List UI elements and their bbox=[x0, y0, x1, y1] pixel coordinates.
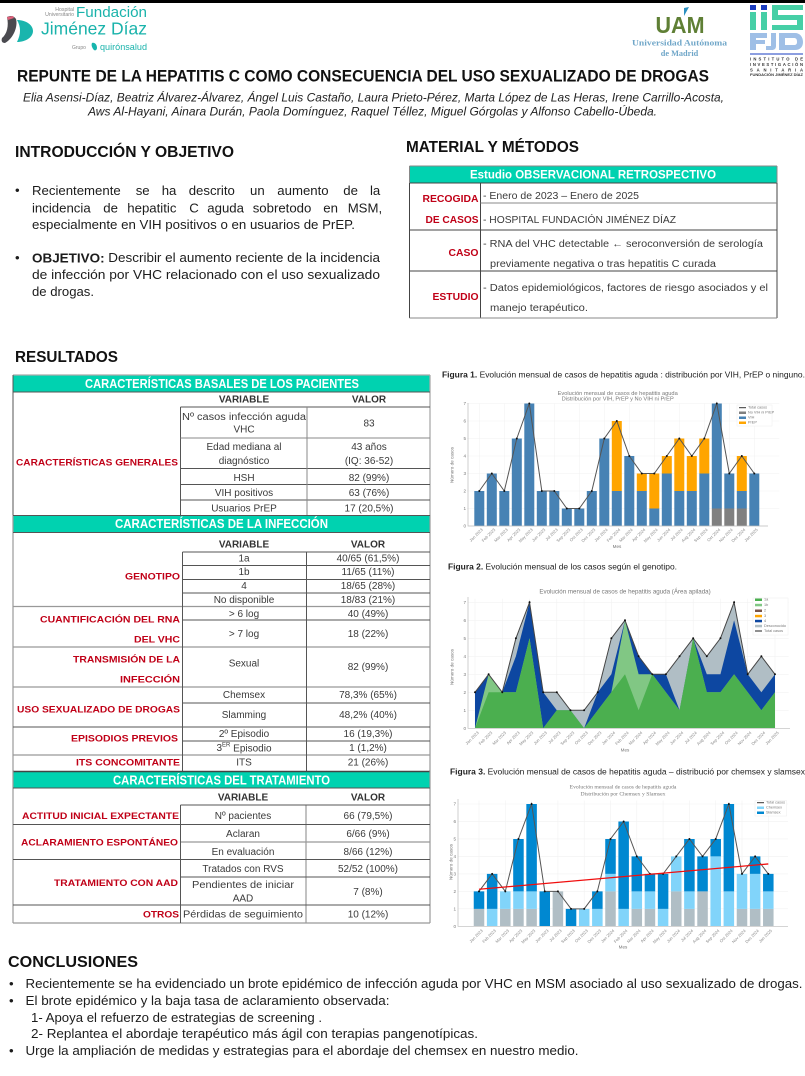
chart: figura 3 stacked bars: Sep 2023 bbox=[560, 928, 576, 944]
panel: características de la infección: VALOR bbox=[351, 539, 386, 550]
chart: figura 3 stacked bars: 0 bbox=[453, 924, 456, 929]
panel: características del tratamiento: Pérdidas de seguimiento bbox=[183, 909, 303, 920]
chart: figura 1 stacked bars: 0 bbox=[463, 524, 466, 528]
chart: figura 3 stacked bars: Jun 2023 bbox=[534, 928, 550, 944]
panel: características de la infección: ITS CONCOMITANTE bbox=[76, 757, 181, 768]
caption: figura 1: Figura 1. Evolución mensual de casos de hepatitis aguda : distribución por VIH, PrEP o ninguno. bbox=[442, 370, 805, 380]
legend: figura 3: Slamsex bbox=[766, 811, 781, 815]
chart: figura 2 stacked area: Feb 2023 bbox=[478, 730, 494, 746]
chart: figura 1 stacked bars: Apr 2024 bbox=[631, 527, 647, 543]
text block: introducción: de infección por VHC relacionado con el uso sexualizado bbox=[32, 267, 380, 282]
text block: introducción: aguda bbox=[207, 200, 245, 215]
logo: Hospital Universitario Fundación Jiménez Díaz: Fundación bbox=[76, 5, 147, 21]
panel: características de la infección: CARACTERÍSTICAS DE LA INFECCIÓN bbox=[115, 516, 328, 531]
text block: conclusiones: 1- Apoya el refuerzo de estrategias de screening . bbox=[31, 1010, 322, 1025]
panel: características de la infección: Sexual bbox=[229, 659, 259, 670]
chart: figura 2 stacked area: Nov 2024 bbox=[737, 730, 753, 746]
panel: características de la infección: 82 (99%) bbox=[348, 662, 388, 673]
chart: figura 1 stacked bars: Jan 2024 bbox=[593, 527, 609, 543]
panel: características de la infección: 48,2% (40%) bbox=[339, 710, 397, 721]
panel: características del tratamiento: Nº pacientes bbox=[215, 811, 271, 822]
text block: introducción: ha bbox=[162, 183, 177, 198]
chart: figura 2 stacked area: May 2024 bbox=[654, 730, 671, 746]
panel: características de la infección: 1a bbox=[238, 553, 250, 564]
logo: Hospital Universitario Fundación Jiménez Díaz: quirónsalud bbox=[100, 42, 147, 53]
text block: introducción: descrito bbox=[189, 183, 235, 198]
panel: características de la infección: 4 bbox=[241, 581, 247, 592]
chart: figura 3 stacked bars: Jul 2023 bbox=[548, 928, 563, 943]
chart: figura 3 stacked bars: Dec 2024 bbox=[744, 928, 760, 944]
text block: introducción: hepatitic bbox=[127, 200, 177, 215]
panel: características del tratamiento: AAD bbox=[233, 893, 253, 904]
logo: Hospital Universitario Fundación Jiménez Díaz bbox=[2, 5, 147, 53]
chart: figura 1 stacked bars: Feb 2024 bbox=[605, 527, 622, 543]
text block: introducción: de bbox=[103, 200, 118, 215]
text block: conclusiones: • bbox=[9, 1043, 14, 1058]
caption: figura 2: Figura 2. Evolución mensual de los casos según el genotipo. bbox=[448, 562, 677, 572]
chart: figura 3 stacked bars: Jan 2024 bbox=[600, 928, 616, 944]
chart: figura 2 stacked area: Mar 2023 bbox=[491, 730, 508, 746]
panel: características del tratamiento: VALOR bbox=[351, 792, 386, 803]
logo: Hospital Universitario Fundación Jiménez Díaz: Universitario bbox=[45, 12, 74, 18]
text block: conclusiones bbox=[9, 976, 803, 1058]
panel: características de la infección: 40 (49%) bbox=[348, 609, 388, 620]
authors bbox=[23, 90, 724, 119]
text block: conclusiones: • bbox=[9, 976, 14, 991]
icon: JD mark bbox=[2, 16, 33, 43]
chart: figura 1 stacked bars: 4 bbox=[463, 454, 466, 458]
text block: conclusiones: Urge la ampliación de medidas y estrategias para el abordaje del chemsex en nuestro medio. bbox=[26, 1043, 578, 1058]
panel: características del tratamiento: 6/66 (9%) bbox=[346, 829, 390, 840]
panel: características basales: Nº casos infección aguda bbox=[182, 412, 306, 423]
text block: conclusiones: • bbox=[9, 993, 14, 1008]
panel: características del tratamiento: 52/52 (100%) bbox=[338, 864, 398, 875]
chart: figura 3 stacked bars: 3 bbox=[453, 871, 456, 876]
logo: Hospital Universitario Fundación Jiménez Díaz: Jiménez Díaz bbox=[41, 18, 147, 38]
panel: características basales: 43 años bbox=[351, 442, 387, 453]
legend: figura 2: Total casos bbox=[764, 629, 783, 633]
panel: características de la infección: EPISODIOS PREVIOS bbox=[71, 733, 179, 744]
panel: características de la infección: Chemsex bbox=[223, 690, 265, 701]
panel: estudio observacional: previamente negativa o tras hepatitis C curada bbox=[490, 259, 716, 270]
panel: características basales bbox=[13, 375, 430, 515]
text block: introducción: un bbox=[250, 183, 265, 198]
chart: figura 1 stacked bars: Jul 2024 bbox=[669, 527, 684, 542]
text block: introducción bbox=[15, 183, 382, 299]
text block: introducción: en bbox=[323, 200, 338, 215]
panel: características de la infección: VARIABLE bbox=[219, 539, 270, 550]
panel: características del tratamiento: ACTITUD INICIAL EXPECTANTE bbox=[22, 811, 180, 822]
text block: introducción: de drogas. bbox=[32, 284, 94, 299]
panel: características de la infección: ER bbox=[222, 742, 231, 748]
panel: características del tratamiento: 66 (79,5%) bbox=[344, 811, 392, 822]
text block: introducción: OBJETIVO: Describir el aumento reciente de la incidencia bbox=[32, 250, 381, 265]
chart: figura 1 stacked bars: 1 bbox=[463, 506, 466, 511]
panel: características del tratamiento: Tratados con RVS bbox=[202, 864, 284, 875]
chart: figura 3 stacked bars: Aug 2024 bbox=[691, 928, 708, 944]
text block: introducción: especialmente en VIH positivos o en usuarios de PrEP. bbox=[32, 217, 355, 232]
logo: Universidad Autónoma de Madrid: de Madrid bbox=[661, 49, 699, 58]
chart: figura 1 stacked bars: May 2023 bbox=[518, 527, 534, 543]
text block: introducción: incidencia bbox=[32, 200, 91, 215]
chart: figura 2 stacked area: Dec 2023 bbox=[587, 730, 603, 746]
panel: características de la infección: USO SEXUALIZADO DE DROGAS bbox=[17, 704, 181, 715]
heading: introducción y objetivo: INTRODUCCIÓN Y OBJETIVO bbox=[15, 143, 234, 161]
heading: material y métodos: MATERIAL Y MÉTODOS bbox=[406, 139, 579, 156]
panel: características del tratamiento: 10 (12%) bbox=[348, 909, 388, 920]
panel: características del tratamiento: 8/66 (12%) bbox=[344, 847, 392, 858]
chart: figura 2 stacked area: Jun 2024 bbox=[669, 730, 685, 746]
text block: introducción: Recientemente bbox=[32, 183, 121, 198]
panel: características de la infección: 16 (19,3%) bbox=[344, 729, 392, 740]
panel: características del tratamiento: Aclaran bbox=[226, 829, 260, 840]
panel: características de la infección: > 6 log bbox=[229, 609, 259, 620]
text block: introducción: de bbox=[343, 183, 358, 198]
panel: estudio observacional: - RNA del VHC detectable ← seroconversión de serología bbox=[483, 239, 763, 250]
panel: características de la infección: TRANSMISIÓN DE LA bbox=[73, 653, 180, 665]
chart: figura 1 stacked bars: Jan 2023 bbox=[468, 527, 484, 543]
legend: figura 3: Chemsex bbox=[766, 806, 782, 810]
chart: figura 2 stacked area: 0 bbox=[463, 726, 466, 731]
chart: figura 2 stacked area: Jan 2024 bbox=[601, 730, 617, 746]
logo: Universidad Autónoma de Madrid: Universidad Autónoma bbox=[632, 38, 728, 48]
chart: figura 1 stacked bars: Jun 2024 bbox=[656, 527, 672, 543]
chart: figura 3 stacked bars: Feb 2024 bbox=[613, 928, 629, 944]
chart: figura 1 stacked bars: Sep 2024 bbox=[693, 527, 709, 543]
panel: características de la infección: > 7 log bbox=[229, 629, 259, 640]
chart: figura 2 stacked area: Oct 2024 bbox=[724, 730, 739, 746]
logo: IIS FJD: SANITARIA bbox=[750, 68, 803, 72]
panel: características de la infección: 18 (22%) bbox=[348, 629, 388, 640]
logo: Universidad Autónoma de Madrid: UAM bbox=[656, 12, 704, 38]
chart: figura 2 stacked area: Mes bbox=[621, 748, 630, 752]
chart: figura 2 stacked area: Evolución mensual de casos de hepatitis aguda (Área apilada) bbox=[539, 588, 711, 596]
chart: figura 1 stacked bars: Dec 2024 bbox=[730, 527, 747, 543]
chart: figura 1 stacked bars: Apr 2023 bbox=[506, 527, 522, 543]
chart: figura 1 stacked bars: Oct 2024 bbox=[706, 527, 722, 543]
chart: figura 2 stacked area bbox=[450, 588, 790, 752]
panel: características basales: VALOR bbox=[352, 394, 387, 405]
panel: características basales: VIH positivos bbox=[215, 488, 273, 499]
panel: estudio observacional bbox=[410, 166, 777, 318]
text block: conclusiones: 2- Replantea el abordaje terapéutico más ágil con terapias pangenotípicas. bbox=[31, 1026, 478, 1041]
text block: introducción: • bbox=[15, 183, 20, 198]
chart: figura 3 stacked bars: Oct 2024 bbox=[718, 928, 734, 944]
panel: características de la infección: 40/65 (61,5%) bbox=[337, 553, 399, 564]
panel: características de la infección: No disponible bbox=[214, 595, 275, 606]
logo: IIS FJD: FUNDACIÓN JIMÉNEZ DÍAZ bbox=[750, 72, 804, 77]
panel: características basales: Usuarios PrEP bbox=[211, 503, 277, 514]
chart: figura 1 stacked bars: Jan 2025 bbox=[743, 527, 759, 543]
chart: figura 2 stacked area: Número de casos bbox=[450, 648, 454, 685]
chart: figura 3 stacked bars: Mar 2023 bbox=[494, 928, 511, 944]
chart: figura 3 stacked bars: Dec 2023 bbox=[586, 928, 603, 944]
panel: características del tratamiento: OTROS bbox=[143, 909, 180, 920]
legend: figura 2 bbox=[753, 598, 788, 635]
chart: figura 2 stacked area: 5 bbox=[463, 636, 466, 641]
chart: figura 1 stacked bars: Jul 2023 bbox=[544, 527, 559, 542]
heading: resultados: RESULTADOS bbox=[15, 349, 118, 366]
chart: figura 2 stacked area: May 2023 bbox=[518, 730, 535, 746]
panel: características basales: diagnóstico bbox=[219, 456, 270, 467]
panel: características del tratamiento: 7 (8%) bbox=[353, 887, 383, 898]
panel: características de la infección: Episodio bbox=[230, 743, 272, 754]
panel: características basales: 83 bbox=[363, 418, 375, 429]
chart: figura 1 stacked bars: Distribución por VIH, PrEP y No VIH ni PrEP bbox=[562, 397, 674, 403]
chart: figura 1 stacked bars: Sep 2023 bbox=[555, 527, 572, 543]
panel: estudio observacional: ESTUDIO bbox=[432, 292, 479, 303]
chart: figura 1 stacked bars: May 2024 bbox=[643, 527, 659, 543]
chart: figura 1 stacked bars: Jun 2023 bbox=[531, 527, 547, 543]
legend: figura 2: Desconocido bbox=[764, 624, 786, 628]
chart: figura 2 stacked area: Apr 2024 bbox=[642, 730, 658, 746]
panel: características de la infección: GENOTIPO bbox=[125, 572, 181, 583]
legend: figura 3: Total casos bbox=[766, 801, 785, 805]
chart: figura 3 stacked bars: Mar 2024 bbox=[626, 928, 642, 944]
panel: características basales: CARACTERÍSTICAS GENERALES bbox=[16, 456, 179, 468]
chart: figura 3 stacked bars: 7 bbox=[453, 802, 456, 806]
panel: características del tratamiento: En evaluación bbox=[212, 847, 274, 858]
chart: figura 1 stacked bars: 7 bbox=[463, 401, 466, 406]
panel: características basales: VARIABLE bbox=[219, 394, 270, 405]
chart: figura 3 stacked bars: May 2023 bbox=[520, 928, 537, 944]
chart: figura 3 stacked bars: Jun 2024 bbox=[666, 928, 682, 944]
chart: figura 1 stacked bars: Mar 2023 bbox=[493, 527, 509, 543]
legend: figura 2: 4 bbox=[764, 619, 766, 623]
panel: características del tratamiento: CARACTERÍSTICAS DEL TRATAMIENTO bbox=[113, 773, 330, 788]
chart: figura 1 stacked bars: Aug 2024 bbox=[680, 527, 697, 543]
panel: características basales: Edad mediana al bbox=[206, 442, 282, 453]
chart: figura 2 stacked area: Oct 2023 bbox=[574, 730, 589, 746]
chart: figura 2 stacked area: Sep 2024 bbox=[709, 730, 726, 746]
chart: figura 2 stacked area: Jul 2024 bbox=[683, 730, 698, 745]
panel: características de la infección: 78,3% (65%) bbox=[339, 690, 397, 701]
panel: características basales: CARACTERÍSTICAS BASALES DE LOS PACIENTES bbox=[85, 376, 359, 391]
chart: figura 2 stacked area: Dec 2024 bbox=[750, 730, 767, 746]
panel: características basales: HSH bbox=[233, 473, 255, 484]
panel: características del tratamiento bbox=[13, 771, 430, 923]
chart: figura 1 stacked bars: 6 bbox=[463, 418, 466, 424]
chart: figura 3 stacked bars: Sep 2024 bbox=[705, 928, 721, 944]
panel: estudio observacional: - HOSPITAL FUNDACIÓN JIMÉNEZ DÍAZ bbox=[483, 213, 676, 226]
legend: figura 2: 1b bbox=[764, 603, 768, 607]
panel: estudio observacional: - Enero de 2023 – Enero de 2025 bbox=[483, 191, 639, 202]
panel: características del tratamiento: Pendientes de iniciar bbox=[192, 880, 295, 891]
chart: figura 1 stacked bars: Feb 2023 bbox=[480, 527, 497, 543]
chart: figura 3 stacked bars: Jul 2024 bbox=[680, 928, 695, 943]
chart: figura 3 stacked bars: Oct 2023 bbox=[574, 928, 589, 944]
chart: figura 2 stacked area: Mar 2024 bbox=[628, 730, 644, 746]
chart: figura 3 stacked bars: 1 bbox=[453, 906, 456, 911]
chart: figura 3 stacked bars: 5 bbox=[453, 836, 456, 842]
text block: introducción: C bbox=[189, 200, 199, 215]
panel: características basales: (IQ: 36-52) bbox=[345, 456, 393, 467]
panel: características del tratamiento: VARIABLE bbox=[218, 792, 269, 803]
panel: características basales: 63 (76%) bbox=[349, 488, 389, 499]
panel: características de la infección: 18/65 (28%) bbox=[341, 581, 395, 592]
panel: estudio observacional: manejo terapéutico. bbox=[490, 303, 588, 314]
chart: figura 2 stacked area: Apr 2023 bbox=[505, 730, 521, 746]
chart: figura 2 stacked area: Sep 2023 bbox=[559, 730, 576, 746]
chart: figura 1 stacked bars: 5 bbox=[463, 436, 466, 441]
authors: Elia Asensi-Díaz, Beatriz Álvarez-Álvarez, Ángel Luis Castaño, Laura Prieto-Pérez, Marta López de Las Heras, Irene Carrillo-Acosta, bbox=[23, 90, 724, 105]
chart: figura 1 stacked bars: Dec 2023 bbox=[580, 527, 597, 543]
panel: características de la infección: 21 (26%) bbox=[348, 757, 388, 768]
legend: figura 1: PrEP bbox=[748, 421, 757, 425]
panel: estudio observacional: Estudio OBSERVACIONAL RETROSPECTIVO bbox=[470, 167, 716, 181]
logo: IIS FJD: INSTITUTO DE bbox=[750, 56, 803, 62]
panel: características de la infección: INFECCIÓN bbox=[120, 673, 180, 685]
text block: introducción: sobretodo bbox=[253, 200, 311, 215]
panel: características de la infección: 1b bbox=[238, 567, 250, 578]
panel: características de la infección: Slamming bbox=[222, 710, 266, 721]
text block: introducción: MSM, bbox=[348, 200, 382, 215]
chart: figura 2 stacked area: Jul 2023 bbox=[547, 730, 562, 745]
text block: conclusiones: Recientemente se ha evidenciado un brote epidémico de infección aguda por VHC en MSM asociado al uso sexualizado de drogas. bbox=[26, 976, 803, 991]
logo: Hospital Universitario Fundación Jiménez Díaz: Grupo bbox=[72, 45, 86, 51]
panel: características de la infección: ITS bbox=[236, 757, 252, 768]
text block: introducción: se bbox=[136, 183, 150, 198]
panel: características del tratamiento: TRATAMIENTO CON AAD bbox=[54, 878, 178, 889]
caption: figura 3: Figura 3. Evolución mensual de casos de hepatitis aguda – distribució por chemsex y slamsex bbox=[450, 767, 805, 777]
chart: figura 3 stacked bars: Jan 2025 bbox=[758, 928, 774, 944]
panel: características de la infección: 1 (1,2%) bbox=[349, 743, 387, 754]
panel: características basales: VHC bbox=[233, 424, 255, 435]
panel: características de la infección: 3 bbox=[216, 743, 222, 754]
legend: figura 1 bbox=[737, 405, 775, 426]
chart: figura 2 stacked area: 3 bbox=[463, 672, 466, 677]
legend: figura 1: VIH bbox=[748, 416, 755, 420]
text block: introducción: • bbox=[15, 250, 20, 265]
chart: figura 3 stacked bars: 2 bbox=[453, 889, 456, 894]
logo: Hospital Universitario Fundación Jiménez Díaz: Hospital bbox=[55, 7, 74, 13]
chart: figura 1 stacked bars: 3 bbox=[463, 471, 466, 476]
authors: Aws Al-Hayani, Ainara Durán, Paola Domínguez, Raquel Téllez, Miguel Górgolas y Alfonso Cabello-Úbeda. bbox=[87, 104, 657, 119]
chart: figura 3 stacked bars: Número de casos bbox=[448, 843, 454, 880]
panel: características basales: 82 (99%) bbox=[349, 473, 389, 484]
chart: figura 3 stacked bars: May 2024 bbox=[652, 928, 668, 944]
chart: figura 3 stacked bars: Jan 2023 bbox=[468, 928, 484, 944]
chart: figura 2 stacked area: Jan 2023 bbox=[464, 730, 480, 746]
chart: figura 3 stacked bars: Evolución mensual de casos de hepatitis aguda bbox=[570, 785, 677, 791]
legend: figura 2: 1a bbox=[764, 598, 769, 602]
chart: figura 3 stacked bars: Feb 2023 bbox=[481, 928, 497, 944]
chart: figura 1 stacked bars: Número de casos bbox=[450, 446, 454, 483]
panel: estudio observacional: CASO bbox=[448, 248, 479, 259]
text block: conclusiones: El brote epidémico y la baja tasa de aclaramiento observada: bbox=[26, 993, 390, 1008]
chart: figura 1 stacked bars: Nov 2024 bbox=[718, 527, 734, 543]
panel: características de la infección: 18/83 (21%) bbox=[341, 595, 395, 606]
chart: figura 3 stacked bars: Apr 2023 bbox=[508, 928, 524, 944]
chart: figura 2 stacked area: Feb 2024 bbox=[614, 730, 630, 746]
panel: estudio observacional: DE CASOS bbox=[426, 215, 479, 226]
heading: conclusiones: CONCLUSIONES bbox=[8, 954, 138, 971]
panel: características de la infección: DEL VHC bbox=[134, 634, 180, 645]
legend: figura 2: 2 bbox=[764, 609, 766, 613]
chart: figura 2 stacked area: 2 bbox=[463, 690, 466, 695]
legend: figura 2: 3 bbox=[764, 614, 766, 618]
logo: IIS FJD bbox=[750, 5, 804, 77]
chart: figura 2 stacked area: Jun 2023 bbox=[533, 730, 548, 746]
chart: figura 3 stacked bars bbox=[448, 785, 788, 950]
panel: características del tratamiento: ACLARAMIENTO ESPONTÁNEO bbox=[21, 836, 179, 848]
legend: figura 1: No VIH ni PrEP bbox=[748, 411, 775, 415]
panel: características de la infección bbox=[13, 515, 430, 771]
panel: estudio observacional: RECOGIDA bbox=[422, 194, 478, 205]
panel: características de la infección: CUANTIFICACIÓN DEL RNA bbox=[40, 613, 180, 625]
text block: introducción: aumento bbox=[277, 183, 329, 198]
logo: Universidad Autónoma de Madrid bbox=[632, 7, 728, 58]
chart: figura 3 stacked bars: 4 bbox=[453, 854, 456, 859]
chart: figura 2 stacked area: Aug 2024 bbox=[696, 730, 712, 746]
chart: figura 2 stacked area: Jan 2025 bbox=[764, 730, 780, 746]
chart: figura 2 stacked area: 4 bbox=[463, 654, 466, 659]
text block: introducción: la bbox=[370, 183, 381, 198]
chart: figura 1 stacked bars: 2 bbox=[463, 488, 466, 494]
chart: figura 1 stacked bars: Mes bbox=[613, 544, 622, 549]
chart: figura 3 stacked bars: 6 bbox=[453, 819, 456, 824]
chart: figura 1 stacked bars: Oct 2023 bbox=[568, 527, 584, 543]
chart: figura 3 stacked bars: Nov 2024 bbox=[731, 928, 747, 944]
chart: figura 1 stacked bars bbox=[450, 391, 779, 549]
logo: IIS FJD: INVESTIGACIÓN bbox=[750, 62, 803, 67]
chart: figura 3 stacked bars: Distribución por Chemsex y Slamsex bbox=[580, 791, 666, 797]
chart: figura 3 stacked bars: Apr 2024 bbox=[639, 928, 655, 944]
legend: figura 3 bbox=[755, 801, 787, 816]
chart: figura 2 stacked area: 6 bbox=[463, 618, 466, 623]
chart: figura 1 stacked bars: Mar 2024 bbox=[618, 527, 634, 543]
panel: estudio observacional: - Datos epidemiológicos, factores de riesgo asociados y el bbox=[483, 283, 768, 294]
panel: características de la infección: 2º Episodio bbox=[219, 729, 270, 740]
chart: figura 2 stacked area: 1 bbox=[463, 708, 466, 713]
legend: figura 1: Total casos bbox=[748, 406, 767, 410]
panel: características de la infección: 11/65 (11%) bbox=[342, 567, 394, 578]
chart: figura 2 stacked area: 7 bbox=[463, 600, 466, 605]
chart: figura 3 stacked bars: Mes bbox=[619, 944, 628, 950]
panel: características basales: 17 (20,5%) bbox=[345, 503, 393, 514]
title: REPUNTE DE LA HEPATITIS C COMO CONSECUENCIA DEL USO SEXUALIZADO DE DROGAS bbox=[17, 68, 709, 86]
chart: figura 1 stacked bars: Evolución mensual de casos de hepatitis aguda bbox=[558, 391, 679, 397]
